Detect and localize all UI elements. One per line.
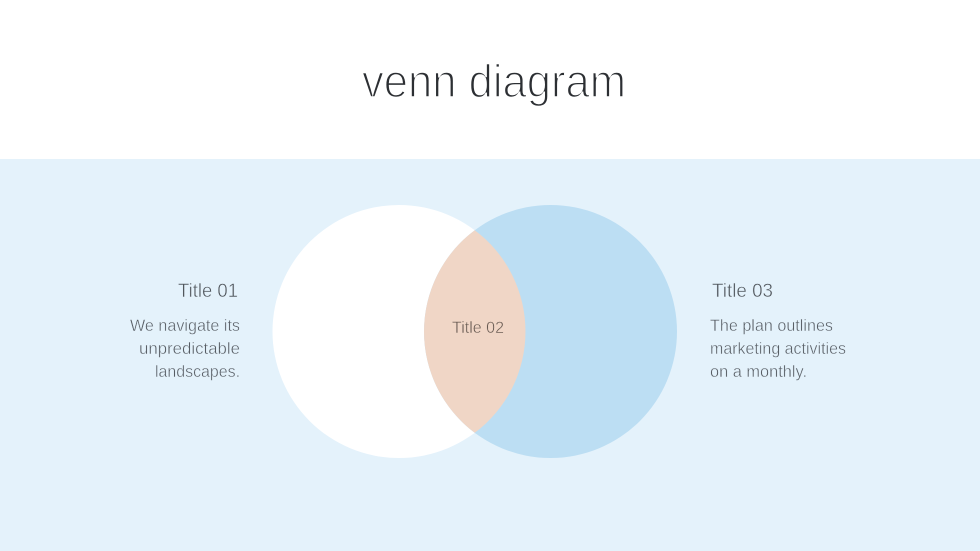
body: left description: We navigate its [130, 317, 240, 335]
title: venn diagram [362, 55, 626, 107]
body: left description [130, 317, 240, 381]
body: right description: marketing activities [710, 340, 846, 358]
body: left description: landscapes. [155, 363, 240, 381]
text block: left [130, 281, 240, 381]
body: right description: The plan outlines [710, 317, 833, 335]
label: Title 02: Title 02 [452, 319, 504, 337]
text block: right [710, 281, 846, 381]
heading: Title 01: Title 01 [178, 281, 238, 302]
circle: left white [272, 205, 526, 458]
body: right description [710, 317, 846, 381]
heading: Title 03: Title 03 [712, 281, 773, 302]
body: right description: on a monthly. [710, 363, 807, 381]
overlap: peach lens [424, 230, 525, 433]
circle: right blue [424, 205, 677, 458]
body: left description: unpredictable [139, 340, 240, 358]
panel: background band [0, 159, 980, 551]
